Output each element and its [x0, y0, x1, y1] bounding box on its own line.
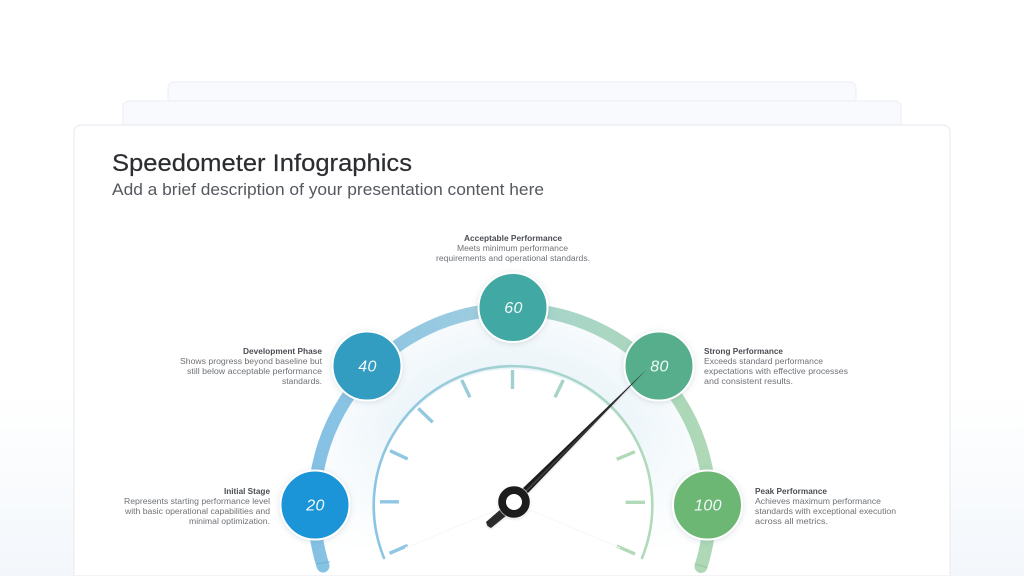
node 20: 20 — [305, 498, 325, 514]
node 40 — [332, 332, 402, 400]
label: initial stage: with basic operational capabilities and — [124, 506, 270, 516]
middle card — [123, 101, 901, 141]
faint wedge lines — [405, 510, 620, 548]
node 20 — [280, 470, 350, 540]
label: acceptable performance: Acceptable Performance — [464, 233, 562, 243]
subtitle: Add a brief description of your presentation content here — [112, 181, 544, 199]
title: Speedometer Infographics — [112, 150, 412, 177]
node 100 — [673, 470, 742, 540]
needle — [486, 370, 646, 528]
outer gauge arc — [314, 309, 710, 568]
node 40: 40 — [358, 358, 377, 376]
main card — [74, 125, 950, 576]
node 80: 80 — [650, 358, 669, 376]
gauge glow band — [342, 320, 684, 494]
label: acceptable performance: requirements and operational standards. — [436, 253, 590, 263]
label: strong performance: expectations with effective processes — [704, 366, 848, 376]
label: strong performance: and consistent results. — [704, 376, 793, 386]
label: strong performance: Strong Performance — [704, 346, 783, 356]
label: acceptable performance: Meets minimum performance — [457, 243, 568, 253]
label: peak performance — [755, 486, 896, 526]
label: development phase: Development Phase — [243, 346, 322, 356]
label: acceptable performance — [436, 233, 590, 263]
label: initial stage — [124, 486, 270, 526]
label: development phase — [180, 346, 323, 386]
label: development phase: still below acceptable performance — [187, 366, 322, 376]
back card — [168, 82, 856, 132]
label: initial stage: Initial Stage — [224, 486, 270, 496]
node 100: 100 — [694, 498, 722, 514]
inner gauge arc — [374, 366, 652, 558]
gauge tick marks — [380, 370, 645, 554]
label: peak performance: standards with exceptional execution — [755, 506, 896, 516]
label: initial stage: minimal optimization. — [189, 516, 270, 526]
label: peak performance: Peak Performance — [755, 486, 827, 496]
node 60: 60 — [504, 300, 523, 317]
label: peak performance: Achieves maximum performance — [755, 496, 881, 506]
node 60 — [478, 273, 548, 342]
label: strong performance: Exceeds standard performance — [704, 356, 823, 366]
label: development phase: Shows progress beyond baseline but — [180, 356, 323, 366]
label: development phase: standards. — [282, 376, 322, 386]
label: initial stage: Represents starting performance level — [124, 496, 270, 506]
label: strong performance — [704, 346, 848, 386]
node 80 — [624, 332, 694, 400]
label: peak performance: across all metrics. — [755, 516, 828, 526]
